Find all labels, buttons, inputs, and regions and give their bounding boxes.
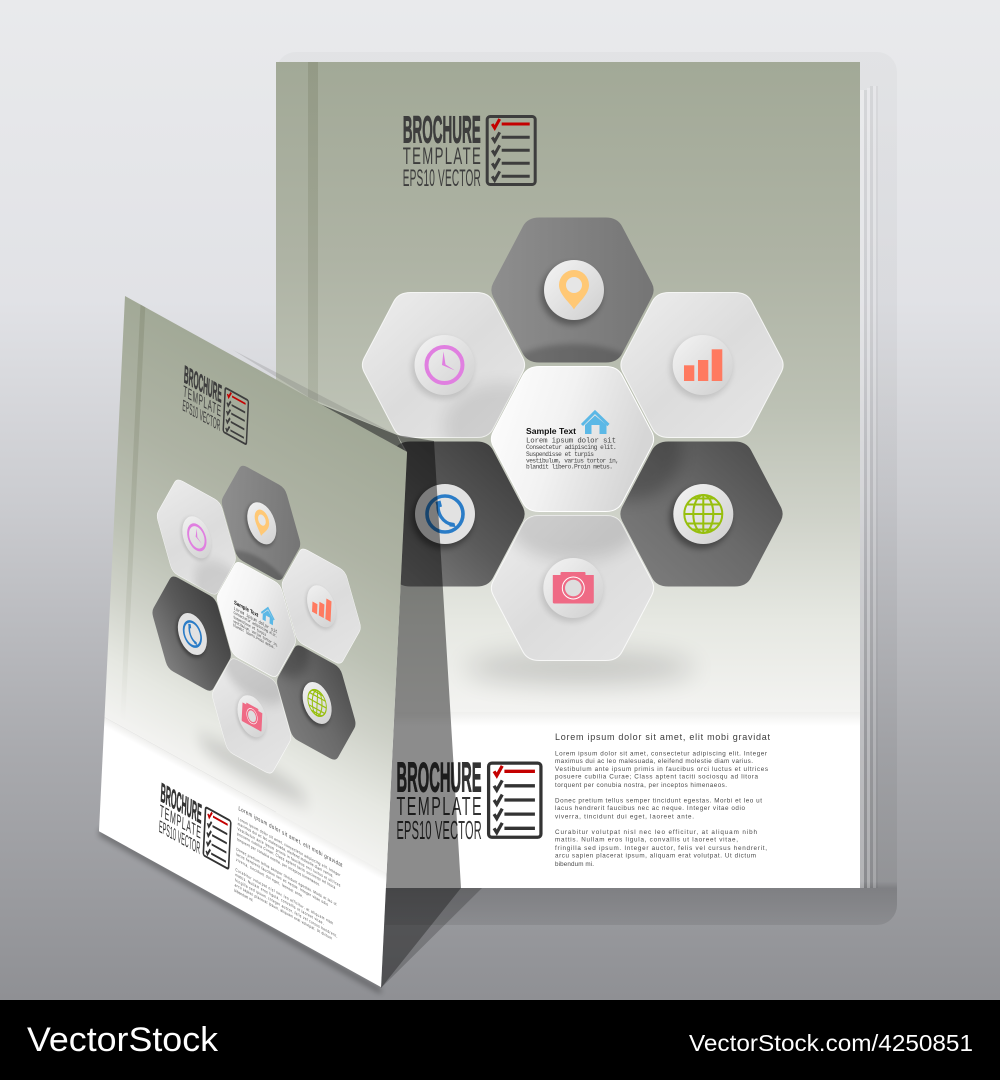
cover background xyxy=(276,62,860,712)
footer text block xyxy=(555,732,770,868)
small hexagon: globe xyxy=(277,645,356,760)
logo: top: TEMPLATE xyxy=(403,143,481,170)
small footer text block: arcu sapien placerat ipsum, aliquam erat volutpat. Ut dictum xyxy=(235,883,332,941)
small folded brochure xyxy=(99,296,407,987)
small logo: top: EPS10 VECTOR xyxy=(182,397,221,435)
footer text block: mattis. Nullam eros ligula, convallis ut laoreet vitae, xyxy=(555,837,738,844)
hexagon: sample text centre: Sample Text xyxy=(526,426,576,436)
footer text block: Curabitur volutpat nisl nec leo efficitur, at aliquam nibh xyxy=(555,829,757,836)
small spine stripe xyxy=(120,305,145,722)
stacked pages xyxy=(860,86,878,888)
fold wedge: dark xyxy=(310,400,407,456)
small logo: footer: BROCHURE xyxy=(160,777,202,830)
hexagon: clock xyxy=(362,292,526,438)
small footer text block: Lorem ipsum dolor sit amet, consectetur adipiscing elit. Integer xyxy=(238,817,341,878)
small footer text block: Donec pretium tellus semper tincidunt egestas. Morbi et leo ut xyxy=(236,847,337,907)
large brochure xyxy=(276,62,860,888)
footer text block: torquent per conubia nostra, per inceptos himenaeos. xyxy=(555,782,727,789)
footer text block: arcu sapien placerat ipsum, aliquam erat volutpat. Ut dictum xyxy=(555,852,756,860)
hexagon cluster ground shadow xyxy=(465,652,695,684)
small footer text block: maximus dui ac leo malesuada, eleifend molestie diam varius. xyxy=(238,822,333,879)
footer text block: viverra, tincidunt dui eget, laoreet ante. xyxy=(555,814,694,820)
small logo: top xyxy=(182,360,249,450)
small footer text block: torquent per conubia nostra, per inceptos himenaeos. xyxy=(237,837,320,887)
small footer text block: Curabitur volutpat nisl nec leo efficitur, at aliquam nibh xyxy=(235,868,333,926)
icon: house xyxy=(582,412,608,434)
logo: footer: BROCHURE xyxy=(396,755,482,801)
small logo: footer: TEMPLATE xyxy=(159,801,201,843)
logo: footer xyxy=(396,755,541,845)
footer text block: Vestibulum ante ipsum primis in faucibus orci luctus et ultrices xyxy=(555,766,768,773)
small footer text block: mattis. Nullam eros ligula, convallis ut laoreet vitae, xyxy=(235,873,324,926)
footer text block: Donec pretium tellus semper tincidunt egestas. Morbi et leo ut xyxy=(555,798,762,804)
small logo: top: BROCHURE xyxy=(183,360,222,408)
spine stripe xyxy=(308,62,318,702)
hexagon: sample text centre: Suspendisse et turpis xyxy=(526,451,594,458)
hexagon: sample text centre: vestibulum, varius tortor in, xyxy=(526,457,619,464)
small hexagon: sample text centre: blandit libero.Proin metus. xyxy=(233,623,275,651)
hexagon: sample text centre: blandit libero.Proin metus. xyxy=(526,463,613,470)
small footer text block: viverra, tincidunt dui eget, laoreet ante. xyxy=(236,857,303,899)
folded back wall xyxy=(381,435,461,988)
watermark: url: VectorStock.com/4250851 xyxy=(689,1030,973,1056)
hexagon: sample text centre: Consectetur adipiscing elit. xyxy=(526,444,617,451)
logo: footer: TEMPLATE xyxy=(396,793,482,821)
footer text block: bibendum mi. xyxy=(555,861,594,868)
small logo: top: TEMPLATE xyxy=(183,382,221,421)
small footer text block: fringilla sed ipsum. Integer auctor, felis vel cursus hendrerit, xyxy=(235,878,337,939)
footer text block: lacus hendrerit faucibus nec ac neque. Integer vitae odio xyxy=(555,805,745,812)
small hexagon: sample text centre: Consectetur adipiscing elit. xyxy=(233,610,278,640)
small hexagon: sample text centre xyxy=(215,551,298,688)
hexagon: bar chart xyxy=(621,292,783,438)
footer text block: Lorem ipsum dolor sit amet, elit mobi gravidat xyxy=(555,732,770,742)
small hexagon: sample text centre: vestibulum, varius tortor in, xyxy=(233,619,278,649)
small hexagon: phone xyxy=(150,565,233,702)
hexagon: globe xyxy=(620,442,783,586)
small footer text block: lacus hendrerit faucibus nec ac neque. Integer vitae odio xyxy=(236,852,328,907)
small footer text block: Vestibulum ante ipsum primis in faucibus orci luctus et ultrices xyxy=(237,827,341,888)
small icon: house xyxy=(261,604,275,626)
footer text block: posuere cubilia Curae; Class aptent taciti sociosqu ad litora xyxy=(555,774,758,780)
small hexagon: bar chart xyxy=(280,537,363,675)
small brochure ground shadow xyxy=(99,828,381,994)
logo: footer: EPS10 VECTOR xyxy=(396,817,482,845)
watermark: brand: VectorStock xyxy=(27,1021,219,1059)
small hexagon: sample text centre: Lorem ipsum dolor sit xyxy=(234,605,278,636)
small logo: footer xyxy=(159,777,231,874)
small hexagon: camera xyxy=(212,658,291,774)
fold wedge: translucent xyxy=(233,350,397,435)
small hexagon: sample text centre: Suspendisse et turpis xyxy=(233,615,266,638)
small footer text block xyxy=(234,806,343,950)
small hexagon: sample text centre: Sample Text xyxy=(234,600,259,619)
footer panel xyxy=(276,712,860,888)
footer text block: Lorem ipsum dolor sit amet, consectetur adipiscing elit. Integer xyxy=(555,750,767,758)
hexagon: sample text centre: Lorem ipsum dolor sit xyxy=(526,438,616,446)
hexagon: location xyxy=(491,218,654,362)
small footer text block: bibendum mi. xyxy=(234,888,253,903)
small footer text block: posuere cubilia Curae; Class aptent taciti sociosqu ad litora xyxy=(237,832,336,890)
watermark bar xyxy=(0,1000,1000,1080)
hexagon: camera xyxy=(491,515,654,661)
footer text block: fringilla sed ipsum. Integer auctor, felis vel cursus hendrerit, xyxy=(555,845,767,852)
small footer panel xyxy=(99,717,387,987)
hexagon: sample text centre xyxy=(491,366,654,512)
hexagon: phone xyxy=(362,442,525,586)
logo: top: BROCHURE xyxy=(403,110,481,152)
footer text block: maximus dui ac leo malesuada, eleifend molestie diam varius. xyxy=(555,758,753,765)
floor shadow xyxy=(381,888,482,988)
logo: top xyxy=(403,110,535,191)
logo: top: EPS10 VECTOR xyxy=(403,164,481,191)
small footer text block: Lorem ipsum dolor sit amet, elit mobi gravidat xyxy=(238,806,343,870)
small logo: footer: EPS10 VECTOR xyxy=(159,816,201,858)
small hexagon: clock xyxy=(156,480,236,594)
small cover background xyxy=(105,296,407,873)
brochure soft shadow xyxy=(276,52,897,925)
small hexagon: location xyxy=(222,466,300,580)
small cluster ground shadow xyxy=(197,729,309,811)
